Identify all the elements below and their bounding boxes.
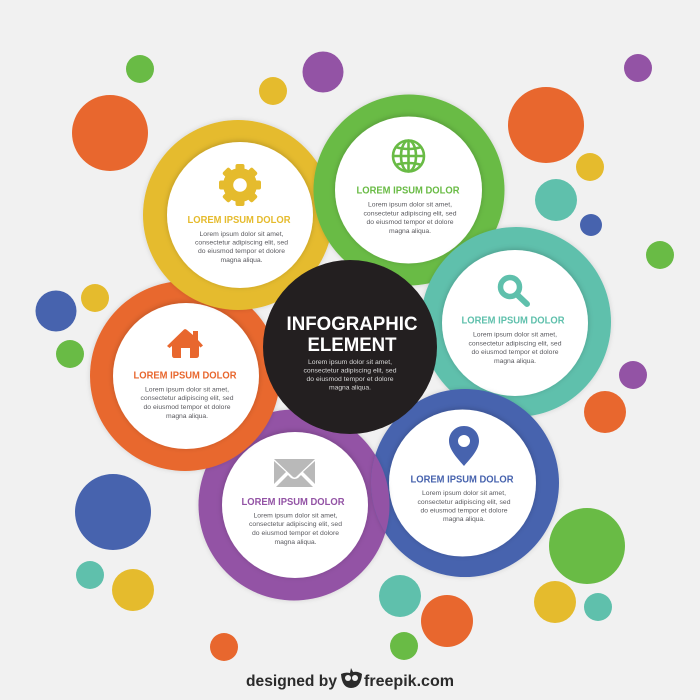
panel: teal	[421, 227, 611, 417]
heading: teal: LOREM IPSUM DOLOR	[462, 316, 565, 326]
panel: blue	[371, 389, 559, 577]
text block: blue: do eiusmod tempor et dolore	[420, 508, 508, 514]
footer credit: designed by	[246, 673, 337, 690]
text block: orange: do eiusmod tempor et dolore	[144, 404, 231, 411]
panel: yellow	[143, 120, 333, 310]
panel: purple	[198, 410, 390, 600]
title: ELEMENT	[308, 334, 397, 356]
text block: blue: consectetur adipiscing elit, sed	[418, 499, 511, 506]
text block: centre: Lorem ipsum dolor sit amet,	[308, 359, 392, 366]
text block: teal: consectetur adipiscing elit, sed	[468, 340, 562, 348]
text block: blue: Lorem ipsum dolor sit amet,	[422, 490, 506, 497]
icon: globe	[393, 140, 424, 172]
purple ring overlap on blue	[371, 454, 391, 534]
title: INFOGRAPHIC	[286, 313, 418, 335]
panel: green	[314, 94, 504, 286]
panel: centre black circle	[263, 260, 437, 434]
text block: purple: do eiusmod tempor et dolore	[252, 530, 339, 537]
text block: centre: do eiusmod tempor et dolore	[306, 376, 394, 383]
text block: teal	[468, 332, 562, 365]
text block: blue	[418, 490, 511, 523]
heading: orange: LOREM IPSUM DOLOR	[134, 370, 237, 382]
footer credit	[246, 668, 454, 690]
icon: envelope	[274, 459, 315, 487]
heading: green: LOREM IPSUM DOLOR	[356, 186, 460, 196]
text block: purple: Lorem ipsum dolor sit amet,	[254, 512, 338, 520]
footer credit: freepik.com	[364, 673, 454, 690]
panel: orange	[90, 281, 280, 471]
text block: purple	[249, 512, 342, 546]
text block: orange	[140, 386, 234, 420]
heading: yellow: LOREM IPSUM DOLOR	[188, 215, 291, 226]
title	[286, 313, 418, 356]
text block: centre: magna aliqua.	[329, 384, 371, 392]
icon: map pin	[449, 426, 479, 466]
text block: yellow	[195, 231, 288, 264]
text block: teal: magna aliqua.	[494, 358, 536, 365]
text block: purple: consectetur adipiscing elit, sed	[249, 521, 342, 528]
text block: orange: Lorem ipsum dolor sit amet,	[145, 386, 229, 394]
text block: yellow: Lorem ipsum dolor sit amet,	[200, 231, 284, 238]
text block: yellow: do eiusmod tempor et dolore	[198, 248, 285, 255]
icon: magnifier	[500, 278, 527, 304]
text block: yellow: consectetur adipiscing elit, sed	[195, 240, 288, 246]
text block: green: Lorem ipsum dolor sit amet,	[368, 202, 452, 208]
icon: gear	[219, 164, 261, 206]
text block: green	[364, 202, 457, 235]
text block: centre: consectetur adipiscing elit, sed	[304, 368, 397, 375]
text block: orange: consectetur adipiscing elit, sed	[140, 395, 234, 402]
text block: green: do eiusmod tempor et dolore	[366, 219, 454, 226]
text block: green: consectetur adipiscing elit, sed	[364, 210, 457, 217]
text block: orange: magna aliqua.	[166, 413, 208, 420]
icon: house	[167, 329, 203, 358]
text block: green: magna aliqua.	[389, 228, 431, 235]
text block: yellow: magna aliqua.	[220, 257, 263, 264]
text block: centre	[304, 359, 397, 392]
text block: teal: do eiusmod tempor et dolore	[472, 349, 559, 356]
text block: teal: Lorem ipsum dolor sit amet,	[473, 332, 557, 338]
heading: purple: LOREM IPSUM DOLOR	[242, 497, 345, 508]
text block: purple: magna aliqua.	[274, 539, 317, 546]
icon: freepik mascot	[341, 668, 362, 688]
heading: blue: LOREM IPSUM DOLOR	[410, 474, 514, 486]
text block: blue: magna aliqua.	[443, 516, 485, 523]
decorative dots	[36, 52, 674, 661]
